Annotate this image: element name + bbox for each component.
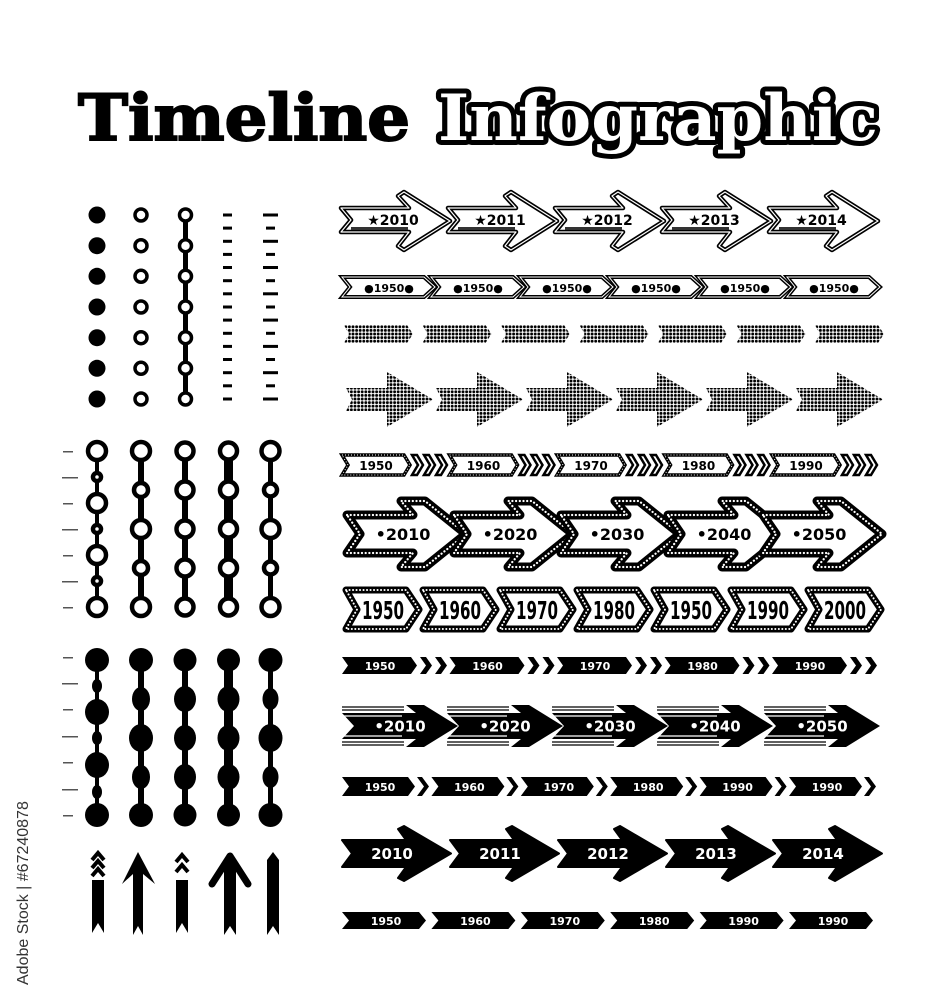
row: black arrows 2010-2014: 2012	[587, 845, 629, 863]
row: outlined arrows 2010-2014: ★2011	[474, 213, 526, 229]
row: speed arrows 2010-2050: •2040	[689, 718, 741, 736]
row: dotted 1950-1990 banners with chevrons: 1950	[359, 459, 393, 473]
row: dotted banners	[344, 325, 884, 343]
row: black banners with double chevrons: 1980	[687, 660, 718, 673]
row: black banners single chevron: 1960	[454, 781, 485, 794]
row: marquee condensed banners: 1970	[516, 596, 558, 625]
row: marquee arrows 2010-2050: •2010	[376, 525, 430, 544]
row: outlined 1950 banners: ●1950●	[453, 282, 503, 295]
row: outlined arrows 2010-2014	[341, 192, 878, 250]
row: dotted 1950-1990 banners with chevrons	[342, 455, 877, 475]
row: black banners bottom: 1980	[639, 915, 670, 928]
row: black banners single chevron: 1970	[543, 781, 574, 794]
row: black banners single chevron: 1950	[365, 781, 396, 794]
row: outlined arrows 2010-2014: ★2010	[367, 213, 419, 229]
row: marquee arrows 2010-2050: •2040	[697, 525, 751, 544]
row: outlined 1950 banners: ●1950●	[809, 282, 859, 295]
title: Timeline	[78, 81, 410, 156]
row: dotted 1950-1990 banners with chevrons: 1960	[467, 459, 500, 473]
row: outlined arrows 2010-2014: ★2012	[581, 213, 633, 229]
row: marquee condensed banners: 1950	[362, 596, 404, 625]
row: speed arrows 2010-2050: •2020	[479, 718, 531, 736]
row: black banners bottom: 1960	[460, 915, 491, 928]
row: black arrows 2010-2014: 2010	[371, 845, 413, 863]
title	[78, 81, 878, 156]
icon: chevron stem arrow	[92, 853, 104, 933]
row: black banners single chevron: 1990	[722, 781, 753, 794]
panel: ring chains	[62, 442, 280, 616]
dash column	[223, 214, 232, 400]
row: marquee condensed banners: 1980	[593, 596, 635, 625]
panel: dot columns	[88, 206, 278, 408]
row: outlined 1950 banners: ●1950●	[364, 282, 414, 295]
row: speed arrows 2010-2050: •2050	[796, 718, 848, 736]
row: black arrows 2010-2014: 2014	[802, 845, 844, 863]
row: black banners single chevron: 1980	[633, 781, 664, 794]
row: black banners with double chevrons: 1950	[365, 660, 396, 673]
row: black banners with double chevrons	[342, 657, 877, 674]
watermark side text: Adobe Stock | #67240878	[15, 801, 32, 985]
ring dots	[135, 209, 147, 405]
row: black banners bottom: 1950	[371, 915, 402, 928]
row: outlined 1950 banners: ●1950●	[631, 282, 681, 295]
icon: pointed stem	[267, 852, 279, 935]
row: outlined arrows 2010-2014: ★2014	[795, 213, 847, 229]
row: black banners with double chevrons: 1990	[795, 660, 826, 673]
row: black banners with double chevrons: 1960	[472, 660, 503, 673]
row: black arrows 2010-2014	[342, 826, 882, 881]
row: dotted 1950-1990 banners with chevrons: 1990	[789, 459, 823, 473]
row: black banners bottom: 1970	[549, 915, 580, 928]
row: outlined 1950 banners: ●1950●	[542, 282, 592, 295]
row: black banners single chevron	[342, 777, 876, 796]
icon: round-head arrow	[212, 856, 248, 935]
row: black banners with double chevrons: 1970	[580, 660, 611, 673]
alternating dash column	[263, 214, 278, 400]
row: dotted 1950-1990 banners with chevrons: 1980	[682, 459, 715, 473]
ring chain	[180, 209, 192, 405]
row: marquee arrows 2010-2050: •2050	[792, 525, 846, 544]
row: black banners bottom	[342, 912, 873, 929]
row: outlined arrows 2010-2014: ★2013	[688, 213, 740, 229]
row: marquee arrows 2010-2050	[347, 501, 882, 567]
row: speed arrows 2010-2050	[342, 705, 880, 747]
row: marquee condensed banners	[346, 590, 881, 629]
ticks	[62, 451, 78, 608]
title: Infographic	[438, 81, 878, 156]
row: marquee condensed banners: 1990	[747, 596, 789, 625]
row: black arrows 2010-2014: 2011	[479, 845, 521, 863]
row: outlined 1950 banners: ●1950●	[720, 282, 770, 295]
icon: solid up arrow	[122, 852, 155, 935]
panel: blob chains	[62, 648, 282, 827]
row: black banners single chevron: 1990	[812, 781, 843, 794]
icon: chevron stem arrow 2	[176, 855, 188, 933]
row: marquee arrows 2010-2050: •2020	[483, 525, 537, 544]
row: marquee condensed banners: 2000	[824, 596, 866, 625]
row: speed arrows 2010-2050: •2010	[374, 718, 426, 736]
row: dotted 1950-1990 banners with chevrons: 1970	[574, 459, 608, 473]
ticks	[62, 657, 78, 816]
row: dotted arrows	[346, 372, 883, 427]
row: outlined 1950 banners	[342, 277, 880, 297]
row: black banners bottom: 1990	[818, 915, 849, 928]
row: marquee arrows 2010-2050: •2030	[590, 525, 644, 544]
panel: vertical arrows	[92, 852, 279, 935]
row: black banners bottom: 1990	[728, 915, 759, 928]
row: black arrows 2010-2014: 2013	[695, 845, 737, 863]
row: marquee condensed banners: 1950	[670, 596, 712, 625]
filled dots	[88, 206, 106, 408]
row: marquee condensed banners: 1960	[439, 596, 481, 625]
row: speed arrows 2010-2050: •2030	[584, 718, 636, 736]
